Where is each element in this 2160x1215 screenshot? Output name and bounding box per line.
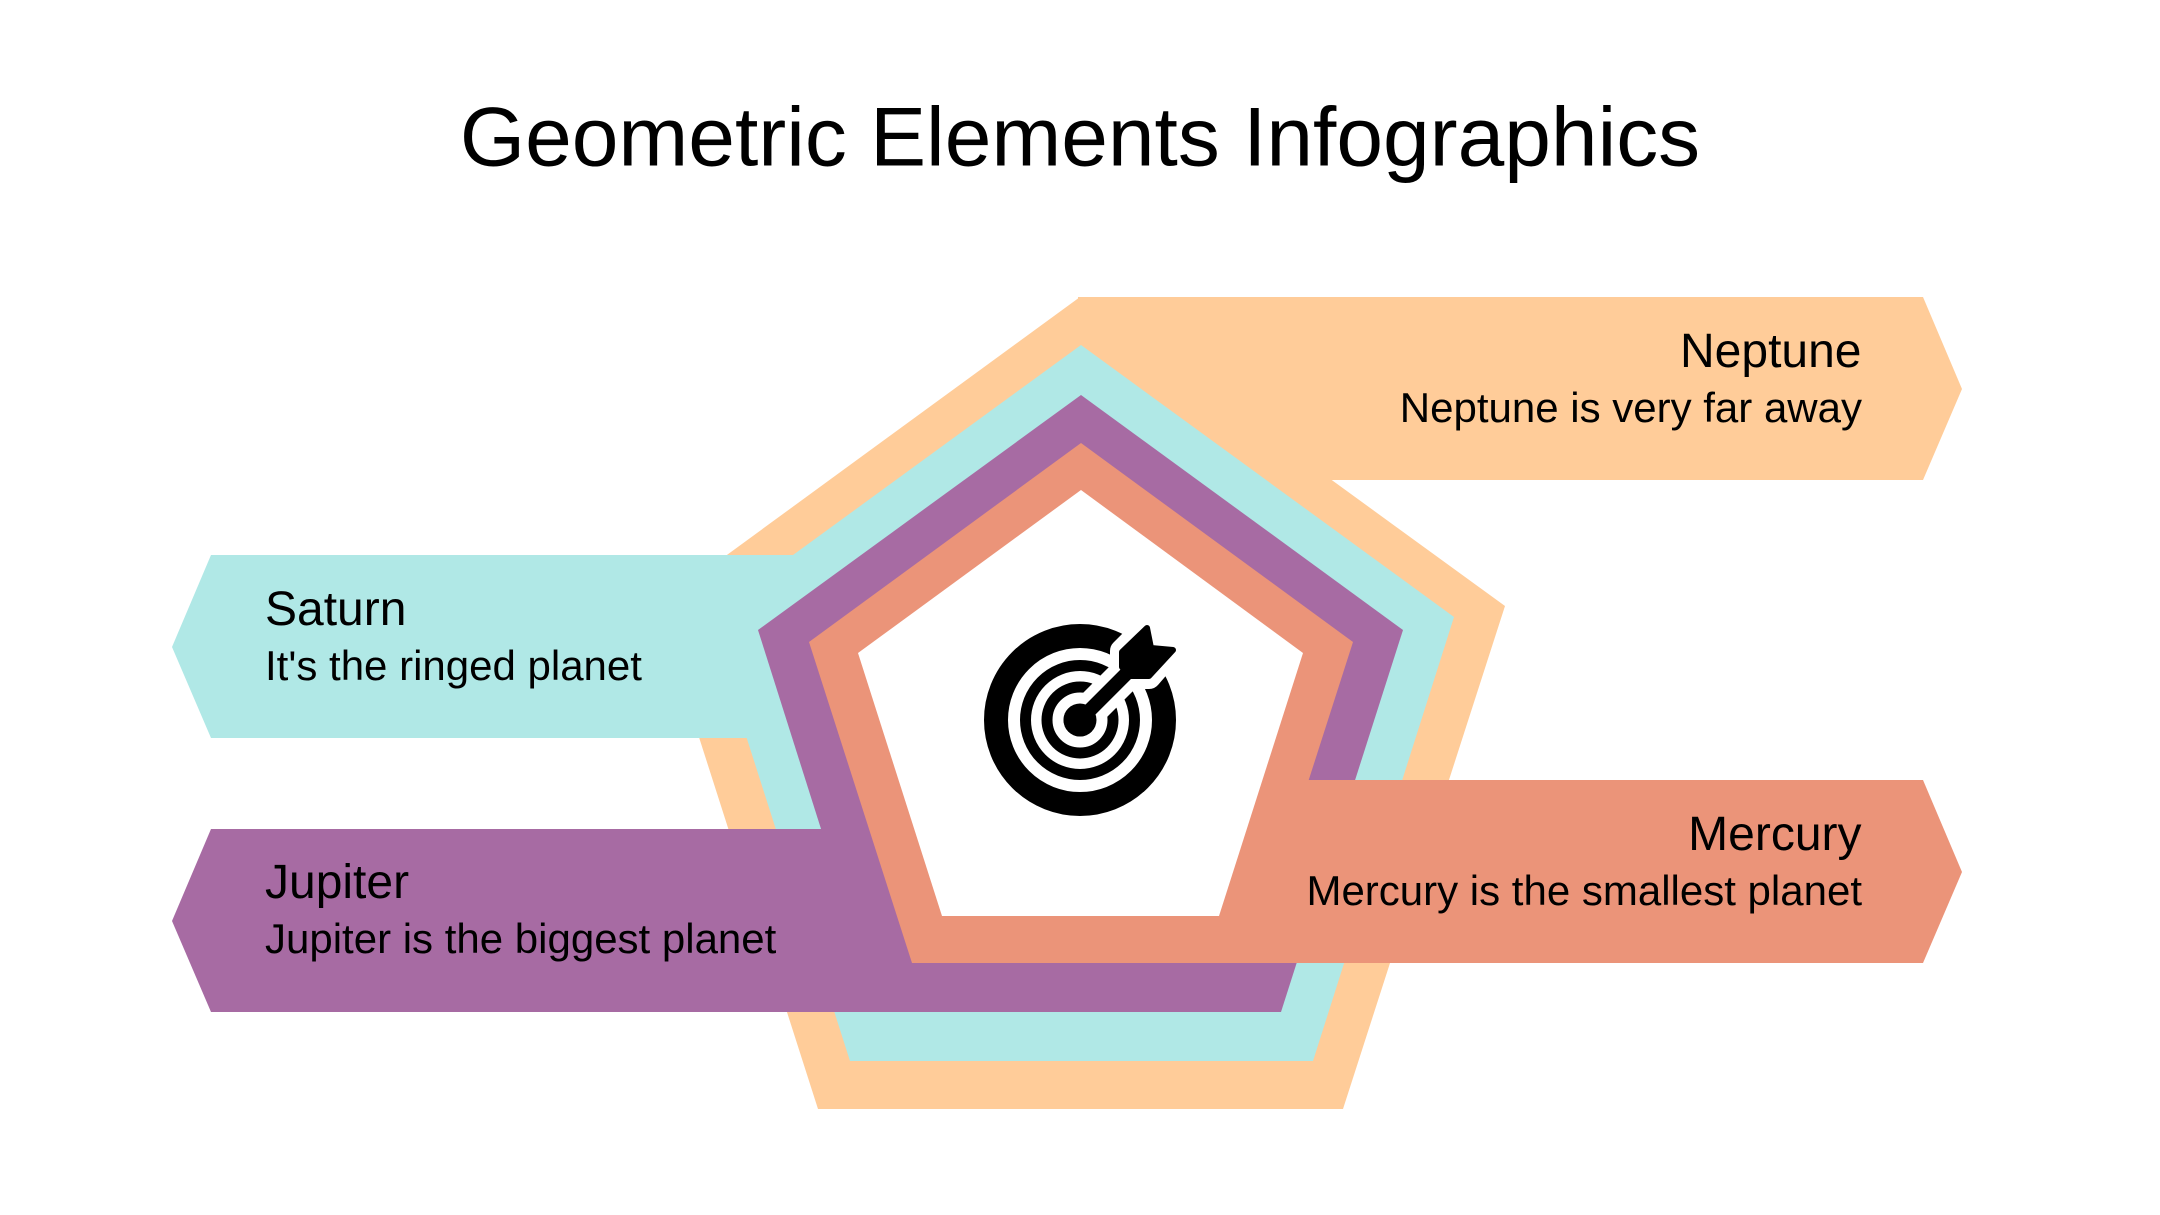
pentagon: salmon [809,443,1353,963]
arrow banner: Mercury [1240,780,1962,963]
pentagon: outer orange [657,297,1505,1109]
arrow banner: Neptune [1078,297,1962,480]
text block: Jupiter [265,856,777,962]
text block: Saturn: Saturn [265,583,406,636]
pentagon: purple [758,395,1403,1012]
text block: Mercury [1306,808,1862,914]
text block: Saturn [265,583,642,689]
text block: Jupiter: Jupiter [265,856,409,909]
arrow banner: Saturn [172,555,900,738]
text block: Mercury: Mercury is the smallest planet [1306,867,1862,914]
text block: Jupiter: Jupiter is the biggest planet [265,915,777,962]
arrow banner: Jupiter [172,829,1000,1012]
pentagon: white center [858,490,1303,916]
text block: Neptune: Neptune is very far away [1400,384,1862,431]
text block: Saturn: It's the ringed planet [265,642,642,689]
title: Geometric Elements Infographics [460,90,1700,184]
text block: Neptune [1400,325,1862,431]
pentagon: cyan [708,345,1454,1061]
text block: Mercury: Mercury [1688,808,1862,861]
text block: Neptune: Neptune [1680,325,1862,378]
icon: target with arrow [996,626,1174,804]
